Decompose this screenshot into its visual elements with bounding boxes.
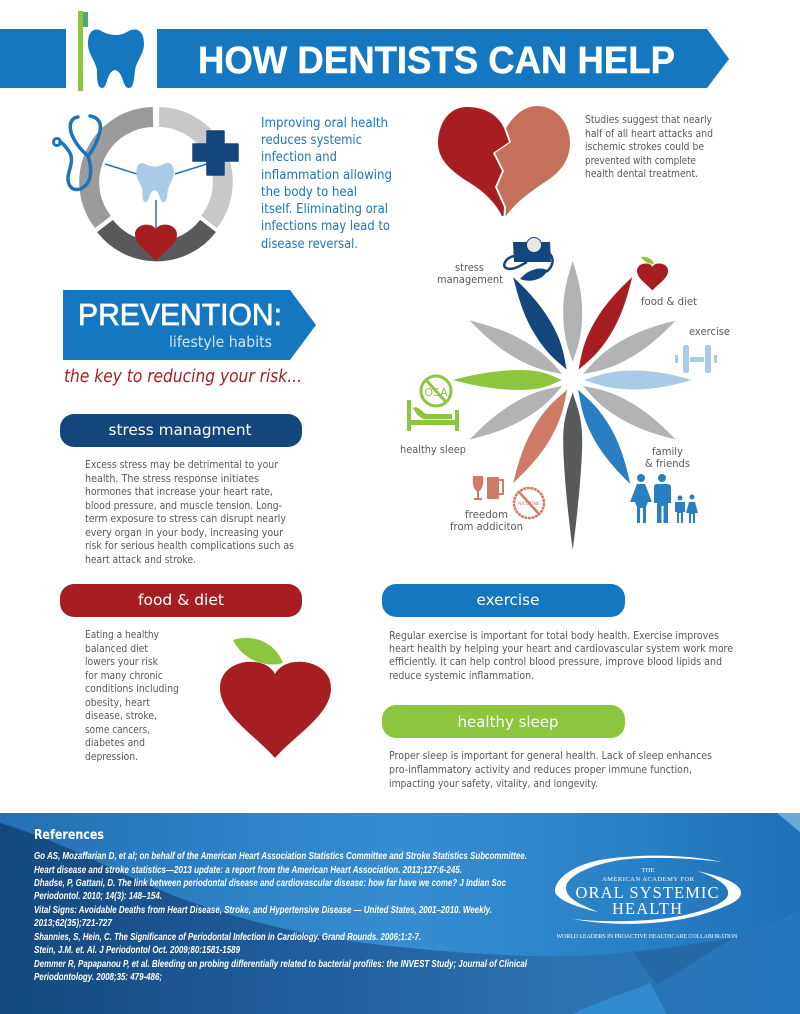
icon: family	[630, 474, 698, 523]
body text: impacting your safety, vitality, and longevity.	[389, 778, 598, 790]
banner arrow	[157, 29, 729, 88]
icon: tooth	[88, 30, 144, 88]
references list: Heart disease and stroke statistics—2013 update: a report from the American Heart Association. 2013;127:6-245.	[34, 864, 462, 876]
body text: depression.	[85, 751, 138, 763]
references list: 2013;62(35);721-727	[33, 917, 113, 929]
flower labels: exercise	[689, 326, 730, 338]
icon: no sleep apnea bed: OSA	[424, 386, 448, 399]
text block: heart attack study: ischemic strokes could be	[585, 141, 704, 153]
text block: oral health intro: the body to heal	[261, 185, 357, 200]
icon: stethoscope	[54, 116, 100, 190]
panel: exercise	[382, 584, 733, 682]
logo: American Academy for Oral Systemic Health: HEALTH	[612, 899, 682, 918]
pill heading	[382, 584, 625, 617]
icon: blood pressure cuff	[504, 238, 553, 281]
flower labels: food & diet	[641, 296, 697, 308]
flower labels: family	[652, 446, 683, 458]
references list: Go AS, Mozaffarian D, et al; on behalf of the American Heart Association Statistics Committee and Stroke Statistics Subcommittee.	[34, 850, 527, 862]
body text: lowers your risk	[85, 656, 158, 668]
pill heading: healthy sleep	[458, 713, 558, 731]
references list	[33, 850, 528, 983]
text block: heart attack study: health dental treatment.	[585, 168, 698, 180]
flower labels: freedom	[465, 509, 508, 521]
petal: grey lower left	[465, 378, 567, 448]
panel: food and diet	[60, 584, 331, 763]
body text	[85, 459, 294, 566]
footer lower light panel	[573, 983, 667, 1014]
flower labels: from addiciton	[450, 521, 523, 533]
body text: health. The stress response initiates	[85, 473, 259, 485]
banner subheading: lifestyle habits	[169, 333, 272, 351]
icon: no nicotine	[514, 488, 544, 518]
ring segment: grey left	[89, 117, 153, 222]
icon: broken heart	[438, 106, 570, 216]
body text: pro-inflammatory activity and reduces proper immune function,	[389, 764, 692, 776]
pill heading: exercise	[476, 591, 540, 609]
pill heading	[60, 584, 302, 617]
icon: heart	[135, 225, 177, 261]
body text: balanced diet	[85, 643, 148, 655]
heart left half	[438, 107, 509, 216]
tagline: the key to reducing your risk...	[64, 366, 302, 387]
panel: healthy sleep	[382, 705, 712, 790]
icon: wine glass and mug	[473, 476, 503, 500]
pill heading: stress managment	[108, 421, 252, 439]
flower labels: healthy sleep	[400, 444, 466, 456]
body text: risk for serious health complications such as	[85, 540, 294, 552]
body text: some cancers,	[85, 724, 150, 736]
body text: conditions including	[85, 683, 179, 695]
icon: dumbbell	[675, 345, 717, 373]
body text: obesity, heart	[85, 697, 150, 709]
petal: grey lower right	[578, 378, 681, 448]
logo: American Academy for Oral Systemic Health	[555, 856, 741, 940]
pill heading: food & diet	[138, 591, 224, 609]
prevention banner	[63, 290, 316, 360]
petal: grey top	[563, 261, 582, 362]
connecting lines	[105, 164, 207, 232]
icon: cross	[193, 131, 238, 175]
body text: Eating a healthy	[85, 629, 159, 641]
body text: for many chronic	[85, 670, 163, 682]
petal: stress management	[505, 272, 575, 375]
logo: American Academy for Oral Systemic Health: ORAL SYSTEMIC	[576, 883, 718, 902]
references list: Demmer R, Papapanou P, et al. Bleeding on probing differentially related to bacterial profiles: the INVEST Study; Journal of Clinical	[34, 958, 528, 970]
body text: heart attack and stroke.	[85, 554, 196, 566]
banner heading: PREVENTION:	[78, 297, 282, 332]
text block: heart attack study: half of all heart attacks and	[585, 128, 713, 140]
references heading: References	[34, 828, 104, 843]
references list: Periodontol. 2010; 14(3): 148–154.	[34, 890, 162, 902]
text block: oral health intro: disease reversal.	[261, 237, 358, 252]
body text: blood pressure, and muscle tension. Long-	[85, 500, 282, 512]
body text: diabetes and	[85, 737, 145, 749]
pill heading	[60, 414, 302, 447]
text block: oral health intro: Improving oral health	[261, 116, 388, 131]
petal: grey upper left	[465, 312, 567, 382]
petal: healthy sleep	[453, 370, 562, 390]
flower labels: & friends	[645, 458, 690, 470]
footer panel	[0, 813, 800, 1014]
icon: apple small	[637, 257, 668, 290]
petal: freedom from addiction	[505, 385, 576, 488]
panel: stress management	[60, 414, 302, 566]
petal: dark bottom	[563, 392, 582, 550]
references list: Vital Signs: Avoidable Deaths from Heart Disease, Stroke, and Hypertensive Disease — United States, 2001–2010. Weekly.	[34, 904, 492, 916]
body text	[389, 750, 712, 790]
banner arrow	[63, 290, 316, 360]
banner left bar	[0, 29, 66, 88]
logo: American Academy for Oral Systemic Health: THE	[642, 867, 654, 874]
text block: oral health intro: infections may lead to	[261, 219, 390, 234]
text block: heart attack study	[585, 114, 713, 180]
references list: Dhadse, P, Gattani, D. The link between periodontal disease and cardiovascular disease: how far have we come? J Indian Soc	[34, 877, 506, 889]
flower chart: lifestyle habits	[453, 261, 692, 550]
body text	[389, 630, 733, 682]
ring segment: light right	[159, 117, 223, 222]
header banner	[0, 11, 729, 91]
icon: apple	[220, 638, 331, 758]
footer lower swoosh	[0, 823, 800, 1014]
text block: oral health intro	[261, 116, 392, 252]
references list: Stein, J.M. et. Al. J Periodontol Oct. 2009;80:1581-1589	[34, 944, 240, 956]
flower labels: stress	[455, 262, 484, 274]
body text: Proper sleep is important for general health. Lack of sleep enhances	[389, 750, 712, 762]
footer background	[0, 813, 800, 1014]
flower labels	[400, 262, 730, 533]
text block: heart attack study: Studies suggest that nearly	[585, 114, 712, 126]
logo: American Academy for Oral Systemic Health: AMERICAN ACADEMY FOR	[602, 876, 695, 883]
body text: efficiently. It can help control blood pressure, improve blood lipids and	[389, 656, 722, 668]
body text: reduce systemic inflammation.	[389, 670, 534, 682]
text block: oral health intro: infection and	[261, 150, 337, 165]
title: HOW DENTISTS CAN HELP	[198, 40, 675, 82]
references list: Shannies, S, Hein, C. The Significance of Periodontal Infection in Cardiology. Grand Rounds. 2006;1:2-7.	[34, 931, 421, 943]
ring segment: dark bottom	[105, 226, 208, 251]
text block: oral health intro: reduces systemic	[261, 133, 362, 148]
petal: grey upper right	[578, 312, 681, 382]
text block: heart attack study: prevented with complete	[585, 155, 696, 167]
icon: toothbrush	[78, 11, 88, 91]
body text: heart health by helping your heart and cardiovascular system work more	[389, 643, 733, 655]
ring diagram	[54, 116, 238, 261]
body text: hormones that increase your heart rate,	[85, 486, 273, 498]
heart right half	[495, 106, 570, 216]
text block: oral health intro: inflammation allowing	[261, 168, 392, 183]
logo: American Academy for Oral Systemic Health: WORLD LEADERS IN PROACTIVE HEALTHCARE COLLABORATION	[556, 934, 738, 940]
text block: oral health intro: itself. Eliminating oral	[261, 202, 388, 217]
petal: exercise	[584, 370, 692, 390]
icon: small tooth	[136, 163, 174, 202]
body text: term exposure to stress can disrupt nearly	[85, 513, 286, 525]
body text: Regular exercise is important for total body health. Exercise improves	[389, 630, 719, 642]
body text	[85, 629, 179, 763]
footer dark wedge	[633, 938, 733, 985]
petal: family and friends	[569, 385, 639, 489]
body text: Excess stress may be detrimental to your	[85, 459, 279, 471]
pill heading	[382, 705, 625, 738]
icon: no nicotine: NICOTINE	[518, 501, 540, 507]
footer corner highlight	[777, 813, 800, 832]
references list: Periodontology. 2008;35: 479-486;	[34, 971, 162, 983]
petal: food and diet	[570, 272, 641, 375]
flower labels: management	[437, 274, 503, 286]
icon: no sleep apnea bed	[407, 376, 459, 431]
body text: every organ in your body, increasing your	[85, 527, 284, 539]
body text: disease, stroke,	[85, 710, 157, 722]
